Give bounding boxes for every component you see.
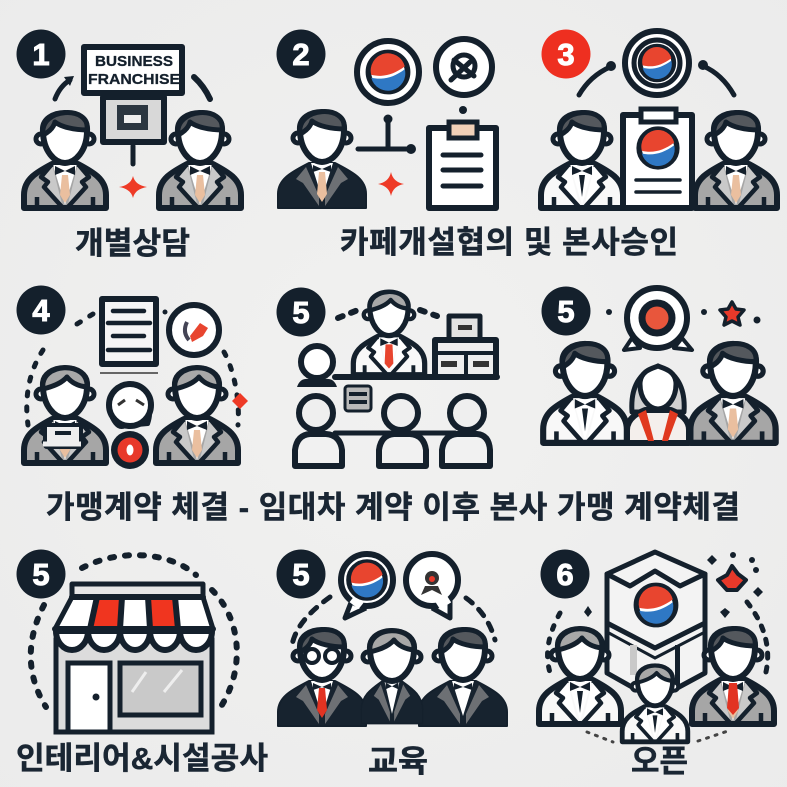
person right (419, 630, 507, 726)
number badge 6: 6 (556, 557, 574, 592)
dotted circle (31, 555, 237, 708)
speech bubble icon (406, 554, 458, 618)
panel: step 5 contract signing (276, 288, 497, 466)
sparkles (584, 552, 763, 618)
panel: step 7 interior (16, 550, 237, 732)
sign: business franchise: BUSINESS (95, 53, 173, 70)
person left (543, 344, 627, 443)
connector lines (358, 106, 467, 154)
number badge 5: 5 (557, 294, 575, 329)
flag badge (357, 41, 419, 103)
sign: business franchise: FRANCHISE (88, 71, 180, 88)
person right (156, 368, 238, 463)
person glasses (278, 630, 366, 726)
table (335, 374, 497, 380)
clipboard (429, 122, 496, 208)
number badge 5 (276, 550, 326, 598)
person centre (622, 666, 688, 742)
number badge 4: 4 (32, 293, 50, 328)
number badge 1 (16, 30, 66, 78)
number badge 1: 1 (32, 37, 50, 72)
panel: step 2 cafe opening consultation (276, 30, 496, 208)
panel: step 3 head office approval (541, 30, 777, 208)
label: step 8: 교육 (368, 744, 428, 779)
red star (378, 172, 404, 196)
panel: step 8 education (276, 550, 507, 726)
arcs (579, 60, 734, 95)
person left (539, 629, 621, 724)
number badge 5 (276, 288, 326, 336)
red star (119, 176, 147, 198)
dotted arc (338, 310, 437, 318)
dotted arcs (292, 597, 495, 645)
person right (159, 113, 241, 208)
logo badge (625, 31, 689, 95)
arrows (55, 76, 210, 164)
number badge 5: 5 (292, 557, 310, 592)
person centre (361, 631, 423, 723)
store (55, 584, 213, 732)
person right (692, 629, 774, 724)
person right (690, 344, 776, 443)
number badge 5 (16, 550, 66, 598)
person (278, 112, 366, 208)
number badge 2: 2 (292, 37, 310, 72)
dotted arcs (27, 310, 238, 425)
panel: step 4 franchise contract (16, 286, 248, 469)
sign: business franchise (84, 47, 182, 142)
number badge 2 (276, 30, 326, 78)
red star (718, 566, 746, 590)
panel: step 6 team (542, 286, 776, 443)
person left (541, 113, 623, 208)
label: step 4-6: 가맹계약 체결 - 임대차 계약 이후 본사 가맹 계약체결 (46, 490, 740, 525)
star (606, 302, 760, 325)
knot badge (436, 39, 492, 95)
number badge 6 (540, 550, 590, 598)
number badge 5: 5 (32, 557, 50, 592)
label: step 1: 개별상담 (75, 226, 190, 261)
document (100, 299, 158, 373)
speech bubble logo (341, 554, 393, 618)
person presenter (353, 292, 425, 375)
panel: step 9 open (539, 550, 774, 742)
number badge 4 (16, 286, 66, 334)
red circle (111, 431, 149, 469)
speech circle (624, 288, 692, 350)
label: step 7: 인테리어&시설공사 (16, 741, 268, 776)
person centre woman (627, 366, 689, 443)
circle icon (169, 305, 219, 355)
panel: step 1 consultation (16, 30, 241, 208)
dotted arcs (548, 602, 768, 742)
label: step 9: 오픈 (631, 744, 688, 779)
head small (297, 346, 337, 387)
red diamond (232, 393, 248, 409)
person left (24, 113, 106, 208)
hexagon building (607, 552, 705, 700)
number badge 5 (542, 286, 590, 336)
number badge 3: 3 (557, 37, 575, 72)
table edge (335, 430, 455, 436)
label: step 2 and 3: 카페개설협의 및 본사승인 (340, 225, 678, 260)
number badge 5: 5 (292, 295, 310, 330)
document icon (345, 386, 371, 411)
cabinets (435, 316, 496, 377)
number badge 3 (542, 30, 590, 78)
person left with document (24, 368, 106, 463)
contract with logo (623, 109, 692, 208)
audience (295, 396, 490, 466)
person right (695, 113, 777, 208)
person centre (109, 384, 151, 427)
